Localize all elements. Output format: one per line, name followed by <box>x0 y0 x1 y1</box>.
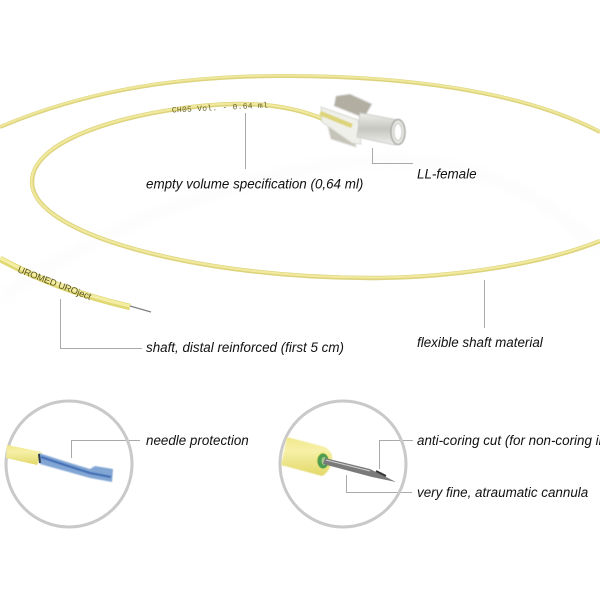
leader lines <box>60 113 484 492</box>
label: shaft: shaft, distal reinforced (first 5 cm) <box>146 340 344 355</box>
printed text: volume: CH05 Vol. - 0.64 ml <box>172 101 268 115</box>
label: needle protection: needle protection <box>146 433 249 448</box>
printed text: brand: UROMED UROject <box>16 264 93 302</box>
detail circle: cannula <box>280 401 406 527</box>
LL-female connector <box>320 94 405 147</box>
detail circle: needle protection <box>6 401 132 527</box>
label: cannula: very fine, atraumatic cannula <box>417 485 588 500</box>
label: empty volume: empty volume specification (0,64 ml) <box>146 176 363 192</box>
label: LL-female: LL-female <box>417 166 477 182</box>
label: flexible shaft: flexible shaft material <box>417 335 544 350</box>
catheter coil <box>0 76 600 312</box>
